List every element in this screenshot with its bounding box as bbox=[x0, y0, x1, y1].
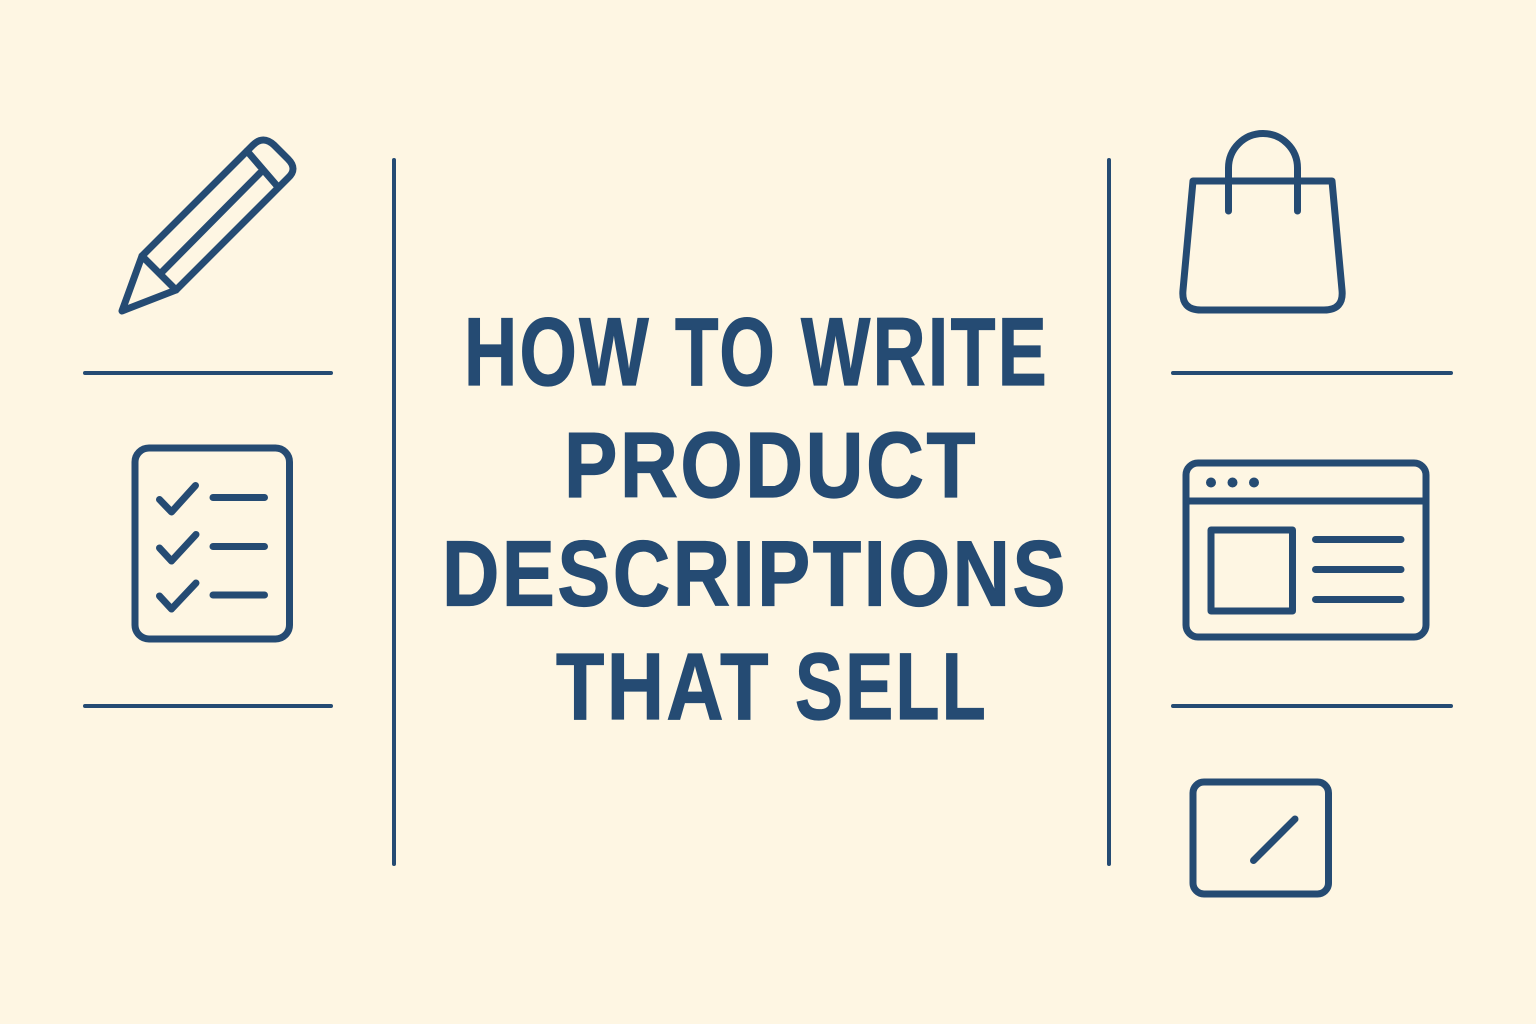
title: WRITE bbox=[801, 299, 1049, 406]
left vertical divider bbox=[392, 160, 396, 864]
title: HOW bbox=[464, 299, 651, 406]
title: SELL bbox=[795, 634, 988, 740]
left lower divider bbox=[85, 704, 331, 708]
right upper divider bbox=[1173, 371, 1451, 375]
title: DESCRIPTIONS bbox=[442, 522, 1068, 626]
icon: pencil bbox=[122, 140, 293, 311]
icon: checklist bbox=[135, 448, 290, 639]
title bbox=[442, 299, 1068, 740]
left upper divider bbox=[85, 371, 331, 375]
right lower divider bbox=[1173, 704, 1451, 708]
title: TO bbox=[675, 299, 777, 406]
icon: square with slash bbox=[1193, 782, 1328, 894]
icon: browser dots bbox=[1206, 478, 1259, 488]
icon: browser window bbox=[1186, 463, 1426, 637]
title: PRODUCT bbox=[564, 413, 978, 517]
icon: shopping bag bbox=[1183, 134, 1342, 310]
right vertical divider bbox=[1107, 160, 1111, 864]
title: THAT bbox=[556, 634, 771, 740]
